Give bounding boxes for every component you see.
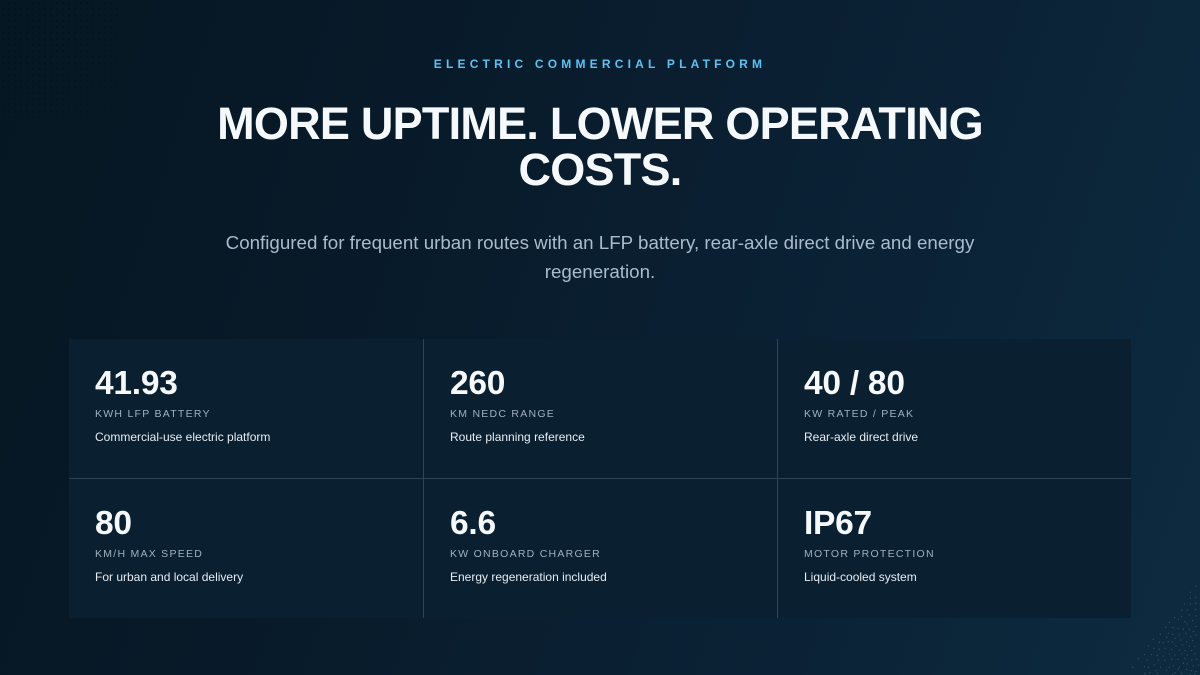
title: COSTS. <box>518 144 682 195</box>
panel: range: Route planning reference <box>450 430 585 444</box>
title <box>217 98 983 195</box>
panel: power: Rear-axle direct drive <box>804 430 918 444</box>
subtitle: Configured for frequent urban routes with an LFP battery, rear-axle direct drive and energy <box>226 232 974 253</box>
panel: protection: MOTOR PROTECTION <box>804 548 935 560</box>
eyebrow label: ELECTRIC COMMERCIAL PLATFORM <box>434 57 766 71</box>
panel: range: KM NEDC RANGE <box>450 408 555 420</box>
panel: range <box>450 365 585 444</box>
panel: protection <box>804 505 935 584</box>
panel: charger <box>450 505 607 584</box>
panel: protection: Liquid-cooled system <box>804 570 917 584</box>
panel: range: 260 <box>450 365 505 402</box>
panel: battery: KWH LFP BATTERY <box>95 408 211 420</box>
panel: charger: KW ONBOARD CHARGER <box>450 548 601 560</box>
title: MORE UPTIME. LOWER OPERATING <box>217 98 983 149</box>
panel: specification grid <box>69 339 1131 618</box>
panel: power: KW RATED / PEAK <box>804 408 914 420</box>
panel: speed: For urban and local delivery <box>95 570 243 584</box>
panel: battery <box>95 365 270 444</box>
panel: battery: 41.93 <box>95 365 178 402</box>
panel: speed: KM/H MAX SPEED <box>95 548 203 560</box>
panel: power <box>804 365 918 444</box>
subtitle <box>226 232 974 282</box>
panel: speed: 80 <box>95 505 132 542</box>
panel: charger: 6.6 <box>450 505 496 542</box>
panel: battery: Commercial-use electric platform <box>95 430 270 444</box>
panel: charger: Energy regeneration included <box>450 570 607 584</box>
subtitle: regeneration. <box>545 261 655 282</box>
panel: power: 40 / 80 <box>804 365 905 402</box>
panel: protection: IP67 <box>804 505 872 542</box>
panel: speed <box>95 505 244 584</box>
